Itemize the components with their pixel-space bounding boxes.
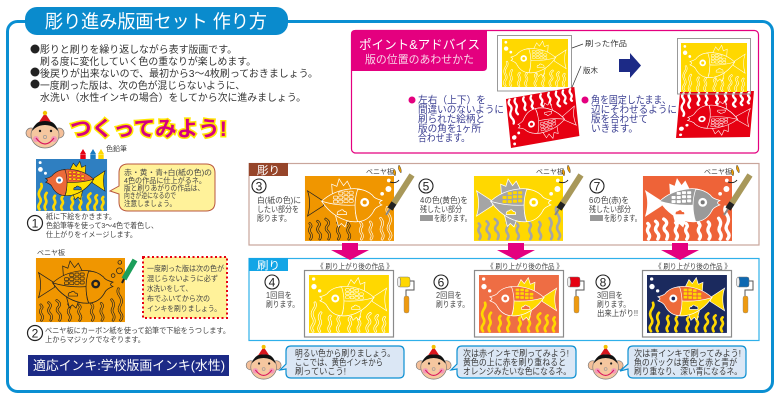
step 7 number: 7 (594, 180, 601, 194)
intro text (30, 43, 318, 104)
speech bubble 3: 魚のバックは黄色と赤と青が (634, 356, 737, 368)
callout: wash the block: 水洗いをして、 (147, 284, 192, 293)
speech bubble 3: 次は青インキで刷ってみよう! (634, 348, 741, 358)
step 8 text: 3回目を (597, 291, 623, 300)
step 5 text (420, 195, 471, 223)
advice text right: 角を固定したまま、 (591, 94, 671, 106)
intro text: 後戻りが出来ないので、最初から3〜4枚刷っておきましょう。 (40, 67, 318, 80)
panel: carving (249, 163, 759, 245)
intro text: 一度刷った版は、次の色が混じらないように、 (40, 79, 245, 92)
mascot and tip 2 (416, 345, 576, 379)
step 7 number (590, 179, 604, 194)
step 2 text (45, 326, 230, 344)
advice heading (351, 30, 487, 71)
label: printed work (572, 38, 627, 48)
print 4 (304, 270, 394, 337)
advice text right: 辺にそわせるように (591, 104, 677, 116)
step 1 text: 色鉛筆等を使って3〜4色で着色し、 (46, 221, 158, 230)
step 5 text: 4の色(黄色)を (420, 195, 468, 205)
printed work with frame (498, 36, 572, 91)
callout: wash the block: 一度刷った版は次の色が (147, 264, 225, 273)
arrow: step 7 to 8 (661, 243, 699, 260)
tab: carve (249, 163, 288, 177)
advice text left: 合わせます。 (418, 132, 470, 144)
plywood fish 3 (305, 176, 394, 241)
step 6 number (434, 275, 448, 290)
arrow: step 3 to 4 (331, 243, 369, 260)
step 6 text (436, 291, 469, 309)
printed work aligned (678, 38, 750, 94)
advice text right (582, 94, 677, 135)
speech bubble 3: 刷り重なり、深い青になるネ。 (634, 366, 742, 376)
step 1 text (46, 212, 158, 239)
advice heading: 版の位置のあわせかた (365, 52, 474, 66)
step number 1: 1 (32, 216, 39, 230)
step 7 text: 6の色(赤)を (589, 195, 629, 205)
step 2 (28, 248, 230, 344)
step number 2 (28, 326, 42, 340)
callout: wash the block: 混じらないように必ず (147, 274, 218, 283)
speech bubble 2: 黄色の上に赤を刷り重ねると (463, 356, 566, 368)
step number 1 (28, 216, 42, 230)
step 8 text: 出来上がり!! (597, 308, 638, 318)
plywood fish 5 (474, 176, 563, 241)
label: plywood 7: ベニヤ板 (704, 167, 732, 176)
callout: note on colours: 版と刷りあがりの作品は、 (124, 184, 204, 192)
step 5 number (419, 179, 433, 194)
step 2 text: 上からマジックでなぞります。 (45, 335, 145, 344)
icon: carving knife 5 (555, 165, 581, 215)
step 6 number: 6 (438, 276, 445, 290)
illustration: traced plywood fish (36, 258, 125, 322)
compatible ink banner (28, 355, 229, 376)
step 4 number (265, 275, 279, 290)
title (25, 7, 288, 35)
step 2 text: ベニヤ板にカーボン紙を使って鉛筆で下絵をうつします。 (45, 326, 230, 335)
advice text right: いきます。 (591, 123, 638, 135)
arrow: navy (619, 53, 641, 78)
speech bubble 2 (451, 346, 576, 378)
callout: wash the block: インキを刷りましょう。 (147, 304, 221, 313)
step 8 text: 刷ります。 (597, 300, 630, 309)
callout: note on colours: 注意しましょう。 (124, 199, 176, 208)
speech bubble 2: オレンジみたいな色になるネ。 (463, 366, 571, 376)
compatible ink banner: 適応インキ:学校版画インキ(水性) (33, 358, 225, 373)
icon: mascot 3 (588, 345, 623, 379)
advice heading: ポイント&アドバイス (359, 38, 480, 52)
speech bubble 3 (620, 346, 746, 378)
arrow: step 5 to 6 (497, 243, 535, 260)
speech bubble 1: 刷っていこう! (295, 366, 346, 376)
speech bubble 1: ここでは、黄色インキから (295, 356, 383, 368)
advice text left (408, 94, 504, 144)
step 7 text (589, 195, 641, 223)
step 1 text: 紙に下絵をかきます。 (46, 212, 116, 221)
icon: red roller (567, 277, 584, 313)
label: colour pencils: 色鉛筆 (106, 144, 127, 153)
caption 4: 《 刷り上がり後の作品 》 (317, 261, 393, 271)
label: plywood 3: ベニヤ板 (366, 167, 394, 176)
step 5 text: 残したい部分 (420, 204, 462, 214)
callout: note on colours: 赤・黄・青+白(紙の色)の (124, 168, 212, 177)
icon: colour pencils (80, 149, 104, 163)
caption 6: 《 刷り上がり後の作品 》 (487, 261, 563, 271)
advice text left: 間違いのないように (418, 103, 504, 116)
callout: wash the block: 布でふいてから次の (147, 294, 210, 303)
icon: mascot 1 (246, 345, 281, 379)
step 7 text: を彫ります。 (604, 214, 641, 223)
step 4 number: 4 (269, 276, 276, 290)
step 4 text (266, 291, 299, 309)
step 3 text: したい部分を (257, 205, 299, 214)
callout: wash the block (143, 257, 227, 318)
callout: note on colours: 4色の作品に仕上がるネ。 (124, 176, 206, 185)
advice text left: 版の角を1ヶ所 (418, 122, 481, 135)
step 6 text: 刷ります。 (436, 300, 469, 309)
step 8 number (596, 275, 610, 290)
step 7 text: 残したい部分 (589, 204, 631, 214)
print 8 (642, 270, 732, 337)
label: printed work: 刷った作品 (585, 38, 627, 48)
step 5 text: を彫ります。 (434, 214, 471, 223)
red block aligned (676, 91, 754, 138)
step 3 number: 3 (256, 180, 263, 194)
step 1 (28, 144, 215, 239)
plywood fish 7 (643, 176, 732, 241)
label: block: 版木 (583, 65, 598, 75)
icon: mascot 2 (416, 345, 451, 379)
mascot and tip 1 (246, 345, 404, 379)
tab: print: 刷り (257, 259, 280, 272)
advice text left: 刷られた絵柄と (418, 112, 485, 126)
speech bubble 2: 次は赤インキで刷ってみよう! (463, 348, 569, 358)
step 8 text (597, 291, 638, 318)
caption 8: 《 刷り上がり後の作品 》 (655, 261, 731, 271)
step 1 text: 仕上がりをイメージします。 (46, 230, 137, 239)
label: plywood 5: ベニヤ板 (536, 167, 564, 176)
icon: green marker (122, 260, 135, 283)
advice text right: 版を合わせて (591, 112, 648, 126)
heading: let's make it: つくってみよう! (70, 118, 227, 141)
step 3 text: 白(紙の色)に (257, 195, 301, 205)
title: 彫り進み版画セット 作り方 (45, 11, 267, 32)
label: block (570, 65, 598, 92)
illustration: coloured fish (36, 159, 107, 211)
icon: carving knife 3 (386, 165, 412, 215)
advice text left: 左右（上下）を (418, 94, 486, 106)
panel: advice (351, 30, 758, 153)
callout: note on colours: 向きが逆になるので (124, 191, 176, 200)
tab: print (249, 258, 288, 272)
icon: blue roller (736, 277, 753, 313)
step 3 text (257, 195, 301, 223)
icon: carving knife 7 (724, 165, 750, 215)
intro text: 刷る度に変化していく色の重なりが楽しめます。 (40, 55, 256, 68)
step 3 text: 彫ります。 (257, 214, 291, 223)
speech bubble 1: 明るい色から刷りましょう。 (295, 348, 395, 358)
step 4 text: 刷ります。 (266, 300, 299, 309)
step number 2: 2 (32, 326, 39, 340)
print 6 (474, 270, 564, 337)
icon: yellow roller (397, 277, 414, 313)
callout: note on colours (110, 164, 215, 211)
label: plywood: ベニヤ板 (37, 248, 65, 257)
panel: printing (249, 258, 759, 340)
tab: carve: 彫り (257, 164, 280, 177)
red block tilted (506, 87, 579, 148)
intro text: 水洗い（水性インキの場合）をしてから次に進みましょう。 (40, 91, 306, 104)
step 6 text: 2回目を (436, 291, 462, 300)
icon: child mascot (26, 111, 64, 148)
step 8 number: 8 (600, 276, 607, 290)
mascot and tip 3 (588, 345, 746, 379)
speech bubble 1 (280, 346, 404, 378)
step 3 number (252, 179, 266, 194)
step 5 number: 5 (423, 180, 430, 194)
intro text: 彫りと刷りを繰り返しながら表す版画です。 (40, 43, 237, 56)
step 4 text: 1回目を (266, 291, 292, 300)
